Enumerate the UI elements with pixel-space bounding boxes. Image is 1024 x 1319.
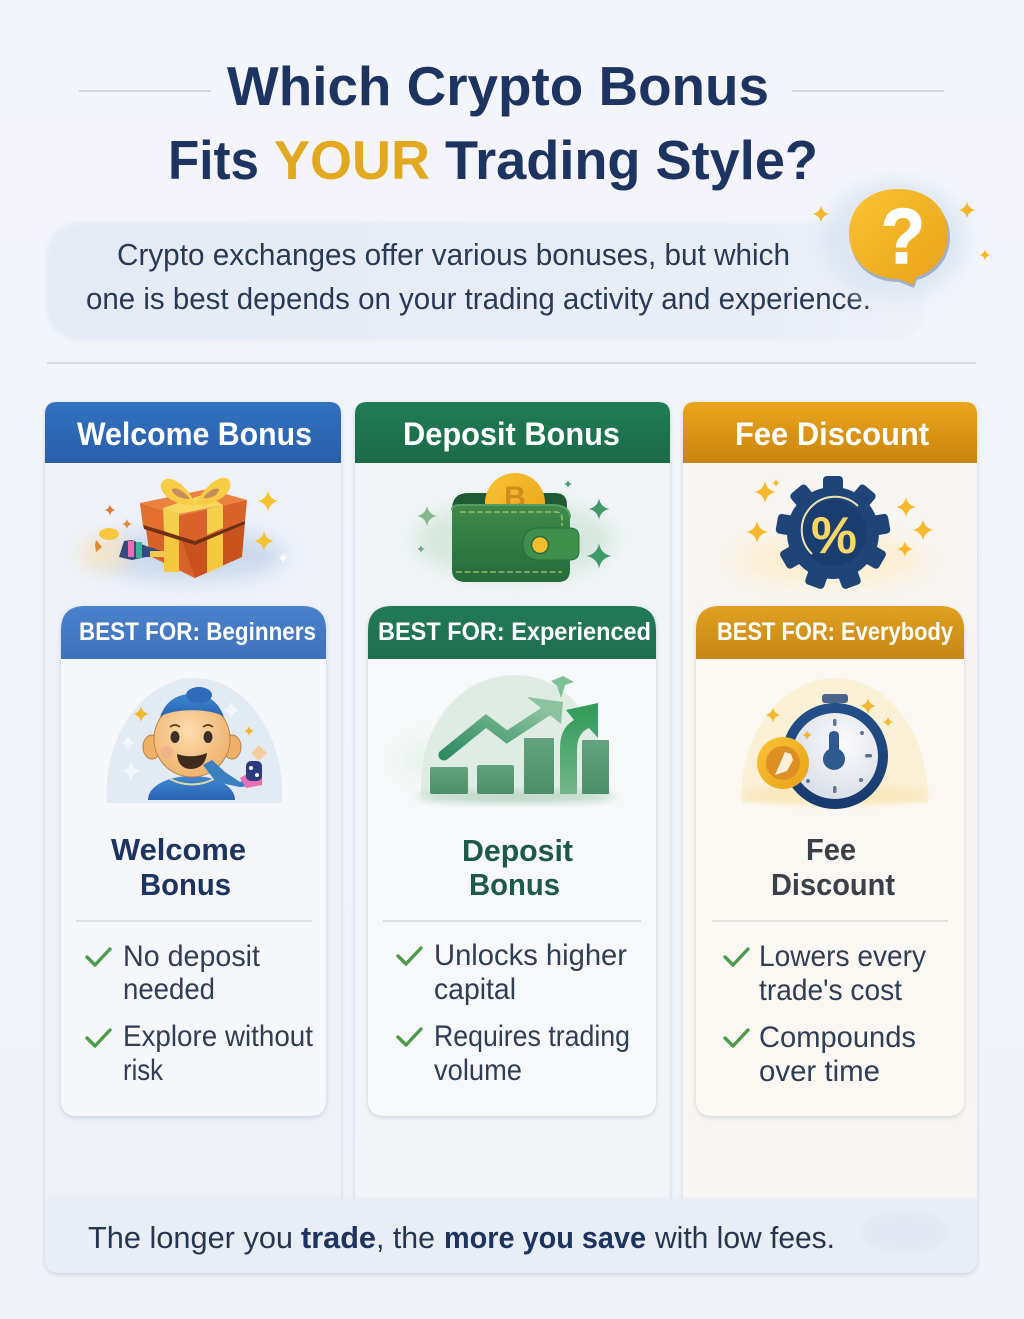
- badge: best for beginners: [61, 606, 326, 659]
- icon: beginner character: [107, 678, 282, 803]
- badge: best for everybody: BEST FOR: Everybody: [717, 618, 953, 646]
- icon: question bubble: [812, 182, 990, 298]
- benefit: requires trading volume: volume: [434, 1054, 522, 1087]
- footer banner: with low fees.: [654, 1221, 835, 1255]
- benefit: lowers every trade's cost: trade's cost: [759, 974, 902, 1007]
- fee discount header: [683, 402, 977, 463]
- icon: growth chart: [400, 675, 616, 803]
- badge: best for everybody: [696, 606, 964, 659]
- icon: question bubble: ?: [881, 192, 925, 280]
- benefit: no deposit needed: [87, 940, 260, 1006]
- benefit: explore without risk: risk: [123, 1054, 163, 1087]
- icon: gift box: [79, 478, 288, 581]
- benefit: lowers every trade's cost: [725, 940, 926, 1007]
- title: Trading Style?: [445, 129, 818, 191]
- icon: stopwatch with coin: [740, 678, 930, 809]
- benefit: explore without risk: [87, 1020, 313, 1087]
- fee discount header: Fee Discount: [735, 416, 929, 452]
- benefit: compounds over time: over time: [759, 1055, 880, 1088]
- benefit: no deposit needed: needed: [123, 973, 215, 1006]
- benefit: explore without risk: Explore without: [123, 1020, 313, 1053]
- card title: deposit bonus: Bonus: [469, 867, 560, 902]
- card title: deposit bonus: Deposit: [462, 833, 573, 868]
- benefit: unlocks higher capital: capital: [434, 973, 516, 1006]
- welcome bonus header: Welcome Bonus: [77, 416, 312, 452]
- panel: deposit bonus: [355, 402, 670, 1199]
- card title: welcome bonus: Welcome: [111, 832, 246, 867]
- benefit: compounds over time: [725, 1021, 916, 1088]
- icon: percent gear: [735, 476, 934, 590]
- benefit: requires trading volume: Requires trading: [434, 1020, 630, 1053]
- footer banner: The longer you: [88, 1221, 293, 1255]
- card title: fee discount: [771, 832, 895, 902]
- title: YOUR: [274, 129, 430, 191]
- title: Which Crypto Bonus: [227, 55, 769, 117]
- card title: welcome bonus: Bonus: [140, 867, 231, 902]
- card title: fee discount: Fee: [806, 832, 856, 867]
- card title: fee discount: Discount: [771, 867, 895, 902]
- deposit bonus header: Deposit Bonus: [403, 416, 620, 452]
- benefit: requires trading volume: [398, 1020, 630, 1087]
- footer banner: [45, 1199, 977, 1273]
- icon: percent gear: %: [811, 507, 857, 565]
- badge: best for beginners: BEST FOR: Beginners: [79, 618, 316, 646]
- welcome bonus header: [45, 402, 341, 463]
- badge: best for experienced: BEST FOR: Experienced: [378, 618, 651, 646]
- card: best for beginners: [61, 606, 326, 1116]
- card title: deposit bonus: [462, 833, 573, 902]
- footer banner: , the: [376, 1221, 435, 1255]
- benefit: no deposit needed: No deposit: [123, 940, 260, 973]
- panel: welcome bonus: [45, 402, 341, 1199]
- icon: wallet with coin: [415, 473, 615, 582]
- benefit: unlocks higher capital: Unlocks higher: [434, 939, 627, 972]
- intro callout: [46, 222, 926, 341]
- badge: best for experienced: [368, 606, 656, 659]
- card: best for experienced: [368, 606, 656, 1116]
- panel: fee discount: [683, 402, 977, 1199]
- intro callout: Crypto exchanges offer various bonuses, but which: [117, 237, 790, 272]
- benefit: unlocks higher capital: [398, 939, 627, 1006]
- title: [79, 55, 944, 191]
- benefit: compounds over time: Compounds: [759, 1021, 916, 1054]
- icon: wallet with coin: B: [504, 481, 526, 514]
- deposit bonus header: [355, 402, 670, 463]
- card: best for everybody: [696, 606, 964, 1116]
- title: Fits: [168, 129, 259, 191]
- footer banner: trade: [301, 1221, 376, 1255]
- card title: welcome bonus: [111, 832, 246, 902]
- benefit: lowers every trade's cost: Lowers every: [759, 940, 926, 973]
- intro callout: one is best depends on your trading activity and experience.: [86, 281, 871, 316]
- footer banner: more you save: [444, 1221, 646, 1255]
